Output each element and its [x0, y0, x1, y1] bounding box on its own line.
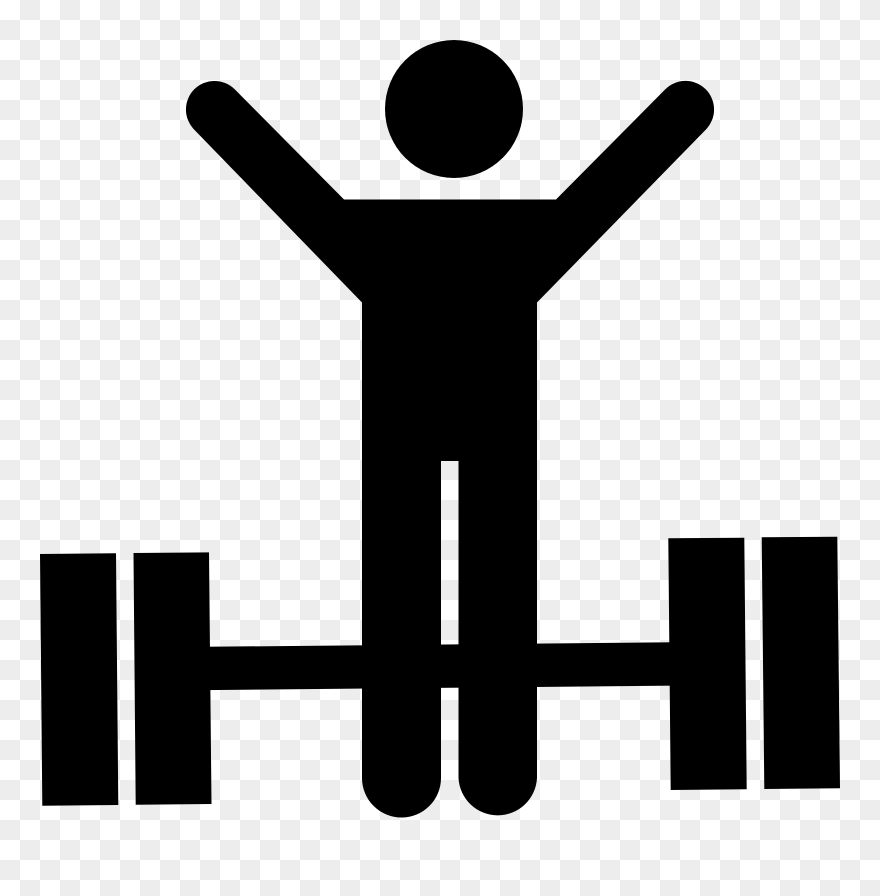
left inner plate	[134, 552, 212, 805]
barbell	[40, 537, 840, 806]
figure body with raised arms and legs	[186, 81, 714, 818]
icon: weightlifter with barbell	[40, 40, 840, 818]
right inner plate	[668, 538, 747, 790]
right outer plate	[762, 537, 840, 789]
bar	[205, 642, 675, 690]
left outer plate	[40, 553, 118, 806]
figure head	[385, 40, 523, 178]
